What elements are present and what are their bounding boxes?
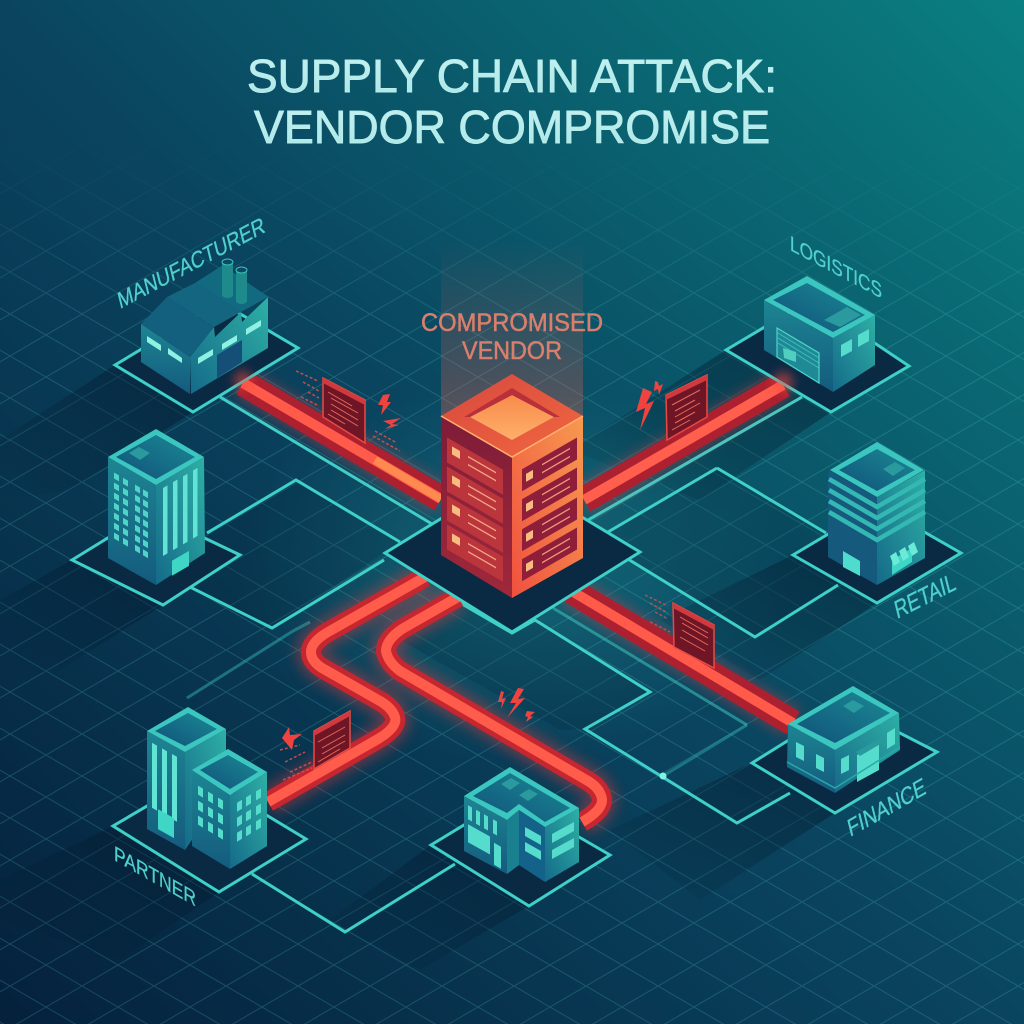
label: compromised vendor: COMPROMISED [421, 309, 603, 337]
title: VENDOR COMPROMISE [254, 101, 770, 153]
label: compromised vendor [421, 309, 603, 365]
building: office tower [108, 429, 205, 585]
title [247, 50, 777, 153]
icon: lightning bolts logistics [636, 381, 663, 430]
label: logistics: LOGISTICS [790, 231, 882, 303]
code window: logistics path [666, 375, 707, 440]
label: manufacturer: MANUFACTURER [115, 212, 267, 315]
malicious data fragments [296, 371, 400, 451]
server bays left [447, 437, 503, 582]
building: finance bank [787, 686, 900, 793]
path: finance [570, 590, 793, 723]
smokestacks [222, 259, 247, 304]
path: manufacturer [243, 383, 441, 499]
data fragments partner [280, 745, 312, 780]
server bays right [522, 437, 577, 581]
building: office block [464, 767, 579, 882]
path: partner [268, 577, 425, 802]
code window: finance path [673, 603, 714, 668]
path: office [386, 597, 602, 822]
label: partner: PARTNER [114, 841, 196, 911]
label: finance: FINANCE [845, 773, 928, 842]
path: logistics [584, 385, 783, 500]
light beam above vendor [441, 240, 583, 430]
pads [72, 300, 961, 906]
icon: lightning bolts center path [498, 688, 535, 722]
label: compromised vendor: VENDOR [462, 337, 562, 365]
glowing node [660, 772, 666, 780]
long building shadows [0, 350, 877, 970]
darker plate interiors [190, 468, 838, 730]
building: logistics warehouse [764, 276, 875, 392]
building: manufacturer factory [141, 259, 268, 394]
network floor plates [187, 397, 838, 932]
building: retail store [828, 442, 925, 585]
central compromised vendor server [441, 374, 583, 598]
title: SUPPLY CHAIN ATTACK: [247, 50, 777, 102]
red spill where paths meet buildings [234, 371, 793, 392]
icon: lightning bolt partner [282, 727, 302, 750]
icon: lightning bolts manufacturer [378, 394, 401, 429]
building: partner towers [147, 707, 267, 869]
soft glow around the vendor [232, 380, 792, 760]
code window: manufacturer path [323, 378, 365, 443]
code window: partner path [314, 711, 350, 769]
glow [243, 383, 793, 822]
data fragments finance [645, 595, 670, 632]
label: retail: RETAIL [892, 569, 958, 625]
red attack paths [243, 383, 793, 822]
